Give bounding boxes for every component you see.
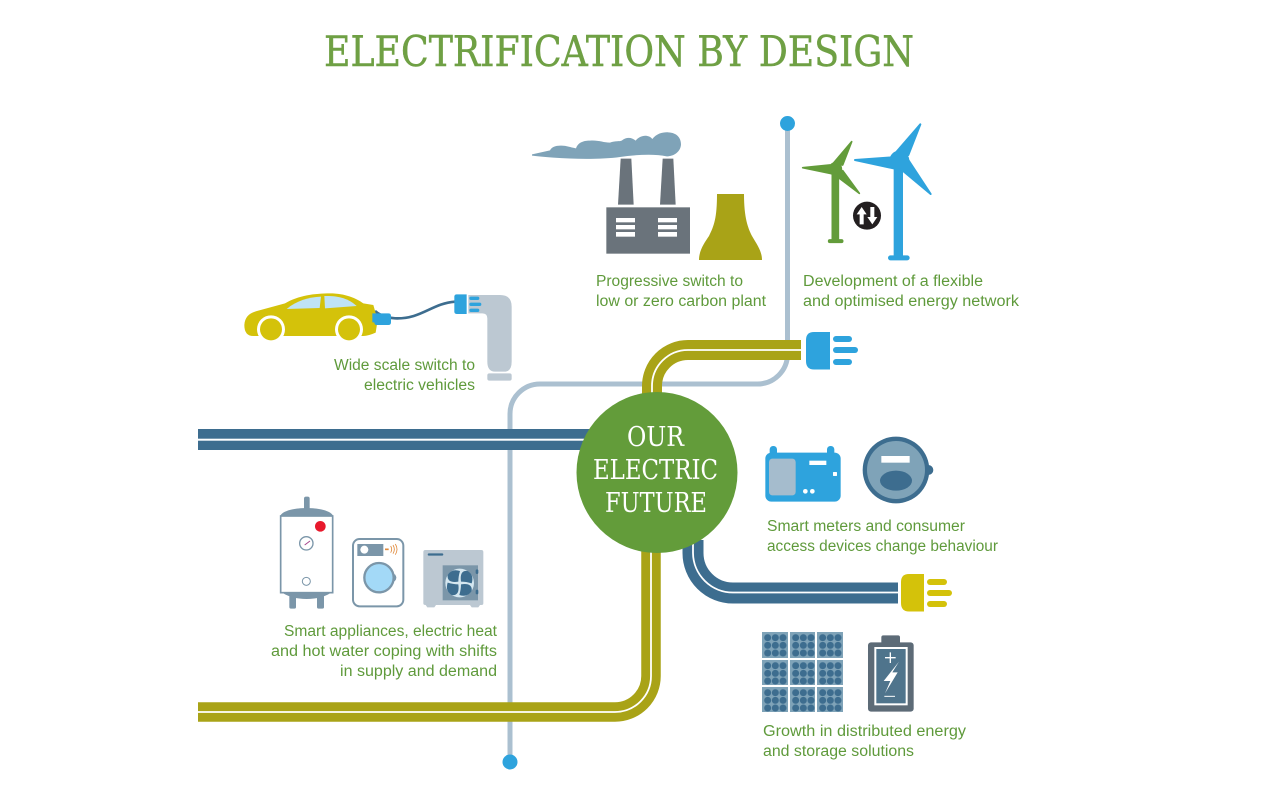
text: smart appliances: and hot water coping with shifts xyxy=(271,643,497,660)
text: smart meters: Smart meters and consumer xyxy=(767,518,965,535)
text: low carbon plant: low or zero carbon plant xyxy=(596,293,767,310)
icon: factory with smoke xyxy=(532,132,690,254)
text: smart appliances: Smart appliances, electric heat xyxy=(284,623,498,640)
icon: battery xyxy=(868,635,914,712)
central circle: our electric future: FUTURE xyxy=(605,488,707,519)
connectors xyxy=(372,294,481,325)
text: energy network: Development of a flexible xyxy=(803,273,983,290)
green turbine xyxy=(803,142,859,242)
factory building xyxy=(606,159,690,254)
washing machine xyxy=(353,539,403,606)
central circle: our electric future xyxy=(576,392,738,553)
text: smart meters: access devices change behaviour xyxy=(767,538,998,555)
cable xyxy=(375,302,455,318)
heat pump xyxy=(423,550,483,607)
olive cable to top right xyxy=(652,350,801,400)
dark blue cable to bottom right xyxy=(693,540,898,593)
blue turbine xyxy=(855,124,931,259)
text: electric vehicles: electric vehicles xyxy=(364,377,475,394)
icon: wind turbines xyxy=(803,124,931,259)
car body xyxy=(244,293,378,336)
text: smart appliances xyxy=(271,623,498,680)
text: distributed energy: Growth in distributed energy xyxy=(763,723,966,740)
text: low carbon plant xyxy=(596,273,767,310)
icon: smart appliances xyxy=(280,497,483,609)
icon: smart meter xyxy=(863,437,933,503)
text: electric vehicles: Wide scale switch to xyxy=(334,357,475,374)
dark blue horizontal cable xyxy=(198,429,598,450)
central circle: our electric future: OUR xyxy=(627,422,685,453)
smoke plume xyxy=(532,132,681,159)
text: smart meters xyxy=(767,518,998,555)
icon: blue plug xyxy=(806,332,858,370)
text: distributed energy xyxy=(763,723,966,760)
thin network line with end dots xyxy=(502,116,795,770)
icon: yellow plug xyxy=(901,574,952,612)
water heater xyxy=(280,497,333,609)
text: low carbon plant: Progressive switch to xyxy=(596,273,743,290)
text: energy network xyxy=(803,273,1019,310)
two-way arrows badge xyxy=(853,202,881,230)
text: smart appliances: in supply and demand xyxy=(340,663,497,680)
title: ELECTRIFICATION BY DESIGN xyxy=(324,27,914,76)
charger post xyxy=(468,295,512,381)
olive cable to bottom left xyxy=(198,545,651,712)
text: electric vehicles xyxy=(334,357,475,394)
icon: consumer access device xyxy=(765,437,933,503)
icon: cooling tower xyxy=(699,194,762,260)
icon: solar panels xyxy=(762,632,843,712)
text: energy network: and optimised energy network xyxy=(803,293,1019,310)
central circle: our electric future: ELECTRIC xyxy=(593,455,718,486)
icon: electric car and charger xyxy=(244,293,512,381)
text: distributed energy: and storage solutions xyxy=(763,743,914,760)
